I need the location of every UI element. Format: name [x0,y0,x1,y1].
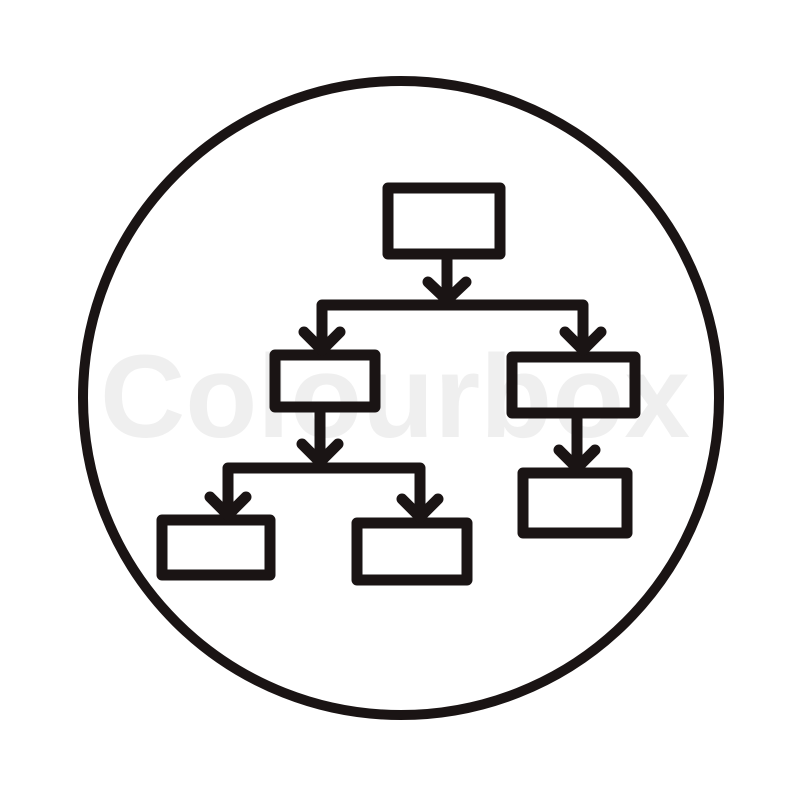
outer circle [83,81,719,715]
box: bottom middle [357,523,467,580]
box: bottom right [523,473,627,533]
connectors [210,254,601,517]
box: top [388,188,500,254]
box: middle right [512,357,635,413]
box: bottom left [162,520,270,575]
flowchart [162,188,635,580]
watermark: Colourbox [100,331,690,463]
box: middle left [275,355,375,407]
